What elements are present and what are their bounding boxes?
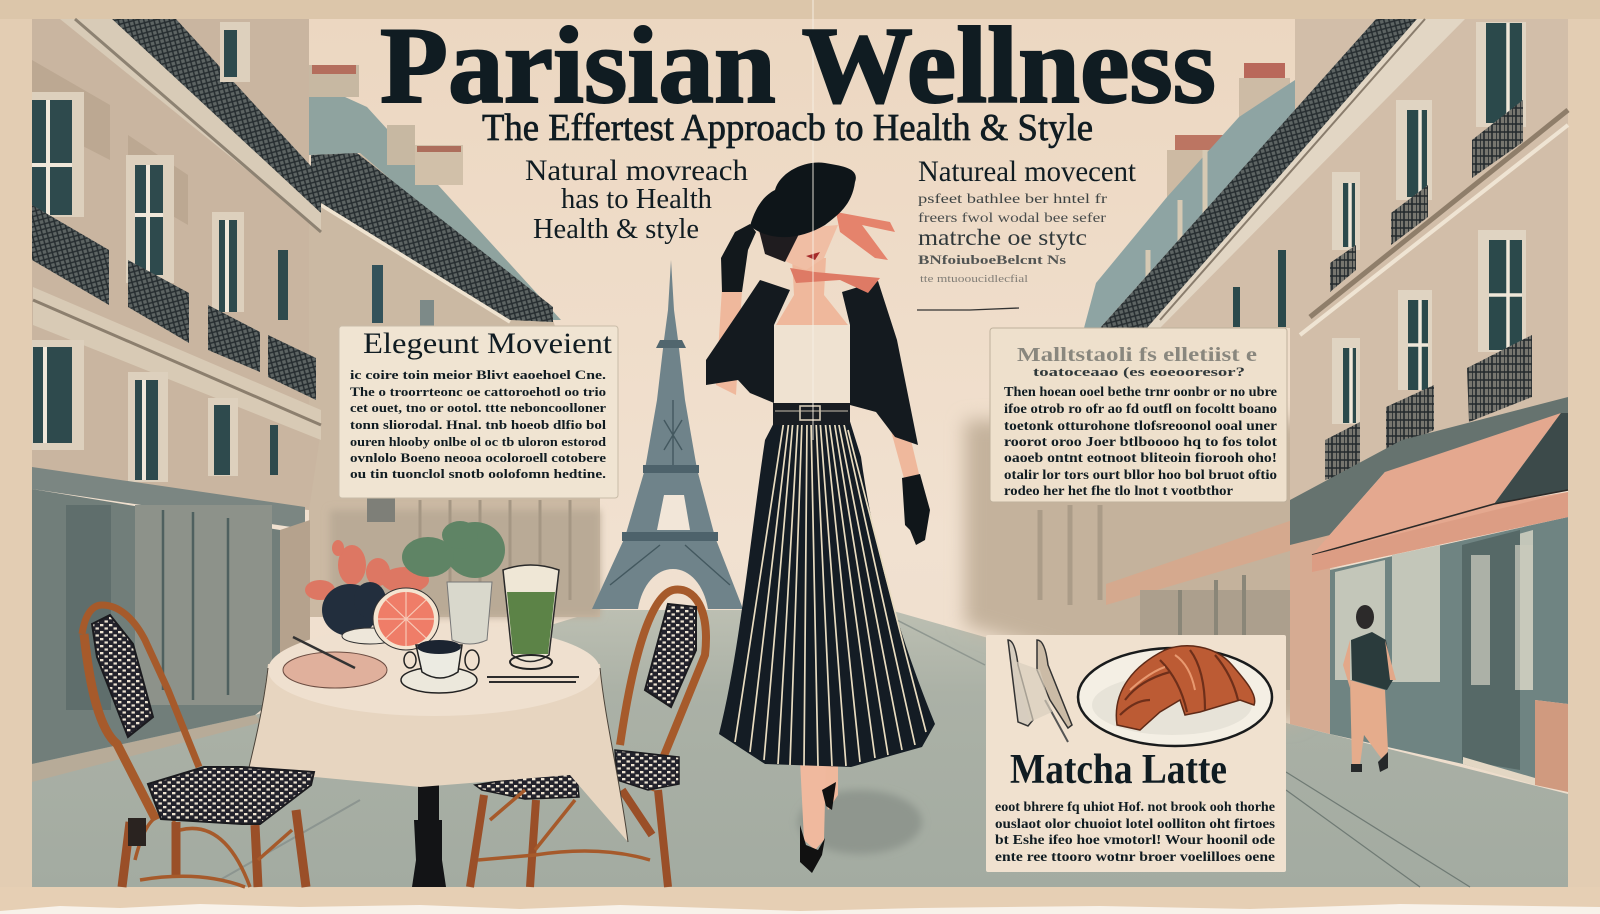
panel: natural movement detail [990,328,1287,502]
table with cloth [240,624,628,887]
legs [818,760,838,810]
wrought iron balconies [1472,100,1523,178]
right building facade [1100,19,1568,545]
neck scarf [790,268,880,293]
hair scarf [836,212,895,260]
awning [1312,413,1568,572]
right intro text: tte mtuooucidlecfial [920,273,1028,285]
panel: elegant movement: The o troorrteonc oe cattoroehotl oo trio [350,384,606,399]
black cardigan [706,280,790,403]
panel: natural movement detail: toatoceaao (es eoeooresor? [1033,364,1245,379]
windows [32,30,288,480]
panel: matcha latte: ente ree ttooro wotnr broer voelilloes oene [995,850,1275,865]
right intro text: BNfoiuboeBelcnt Ns [918,252,1066,267]
grapes [322,582,386,636]
icon: plate [1078,648,1272,746]
panel: matcha latte: ouslaot olor chuoiot lotel oolliton oht firtoes [995,817,1276,832]
panel: natural movement detail: rodeo her het fhe tlo lnot t vootbthor [1004,484,1233,499]
panel: elegant movement [339,326,618,498]
right intro text [917,155,1137,310]
icon: croissant [1116,646,1255,730]
panel: natural movement detail: oaoeb ontnt eotnoot bliteoin fiorooh oho! [1004,451,1277,466]
flowers [305,540,429,600]
panel: matcha latte [986,635,1286,872]
wrought iron balconies [32,205,109,305]
white top [774,322,850,405]
panel: natural movement detail: toetonk otturohone tlofsreoonol ooal uner [1004,419,1277,434]
panel: matcha latte: eoot bhrere fq uhiot Hof. not brook ooh thorhe [995,800,1275,815]
window surrounds [32,22,250,482]
left cafe chair [82,605,314,887]
matcha glass [503,565,559,662]
windows [1233,23,1522,423]
panel: elegant movement: ou tin tuonclol snotb oolofomn hedtine. [350,466,606,481]
panel: natural movement detail: ifoe otrob ro ofr ao fd outfl on focoltt boano [1004,402,1277,417]
right forearm [888,415,920,482]
lower glove [902,474,930,545]
panel: natural movement detail: Malltstaoli fs elletiist e [1017,344,1257,366]
street pavement [32,610,1568,887]
Eiffel Tower [592,260,743,609]
panel: elegant movement: ouren hlooby onlbe ol oc tb uloron estorod [350,434,607,449]
right intro text: psfeet bathlee ber hntel fr [918,192,1107,207]
panel: natural movement detail: Then hoean ooel bethe trnr oonbr or no ubre [1004,385,1277,400]
right intro text: matrche oe stytc [918,225,1087,250]
left intro text: Health & style [533,214,699,245]
gloved hand [721,224,756,292]
saucer [401,667,477,693]
right cafe chair [470,590,706,887]
skirt [719,415,935,767]
coffee cup [416,645,462,678]
panel: elegant movement: ic coire toin meior Blivt eaoehoel Cne. [350,367,606,382]
knife [487,677,579,682]
panel: elegant movement: ovnlolo Boeno neooa ocoloroell cotobere [350,450,606,465]
panel: matcha latte: bt Eshe ifeo hoe vmotorl! Wour hoonil ode [995,833,1275,848]
left intro text [525,154,748,245]
woman in hat and striped skirt [706,163,935,873]
panel: elegant movement: Elegeunt Moveient [363,327,613,360]
title: Parisian Wellness [380,5,1216,126]
subtitle: The Effertest Approacb to Health & Style [482,107,1093,149]
hat [750,163,856,237]
panel: elegant movement: cet ouet, tno or ootol. ttte neboncoolloner [350,400,606,415]
right background buildings [965,63,1330,724]
food and drinks on table [283,521,579,693]
pedestrian [1343,605,1396,772]
neck and face [776,258,848,325]
left background building [309,65,600,617]
plate under fruit [342,628,398,644]
belt [773,403,850,425]
panel: natural movement detail: otalir lor tors ourt bllor hoo bol bruot oftio [1004,468,1277,483]
panel: elegant movement: tonn sliorodal. Hnal. tnb hoeob dlfio bol [350,417,606,432]
left intro text: has to Health [561,184,712,215]
right intro text: freers fwol wodal bee sefer [918,211,1106,226]
raised arm [716,288,742,395]
right shopfront [1290,397,1568,792]
right intro text: Natureal movecent [918,155,1137,188]
greens [402,521,505,578]
left building facade [32,19,321,510]
side plate with pastry [283,652,387,688]
grapefruit [373,588,439,650]
icon: cutlery [1008,640,1072,742]
left intro text: Natural movreach [525,154,748,187]
left ground floor shop [32,467,310,764]
fold line [812,0,814,440]
vase [447,582,492,644]
panel: natural movement detail: roorot oroo Joer btlboooo hq to fos tolot [1004,435,1277,450]
panel: matcha latte: Matcha Latte [1010,747,1227,793]
window surrounds [1332,22,1526,424]
